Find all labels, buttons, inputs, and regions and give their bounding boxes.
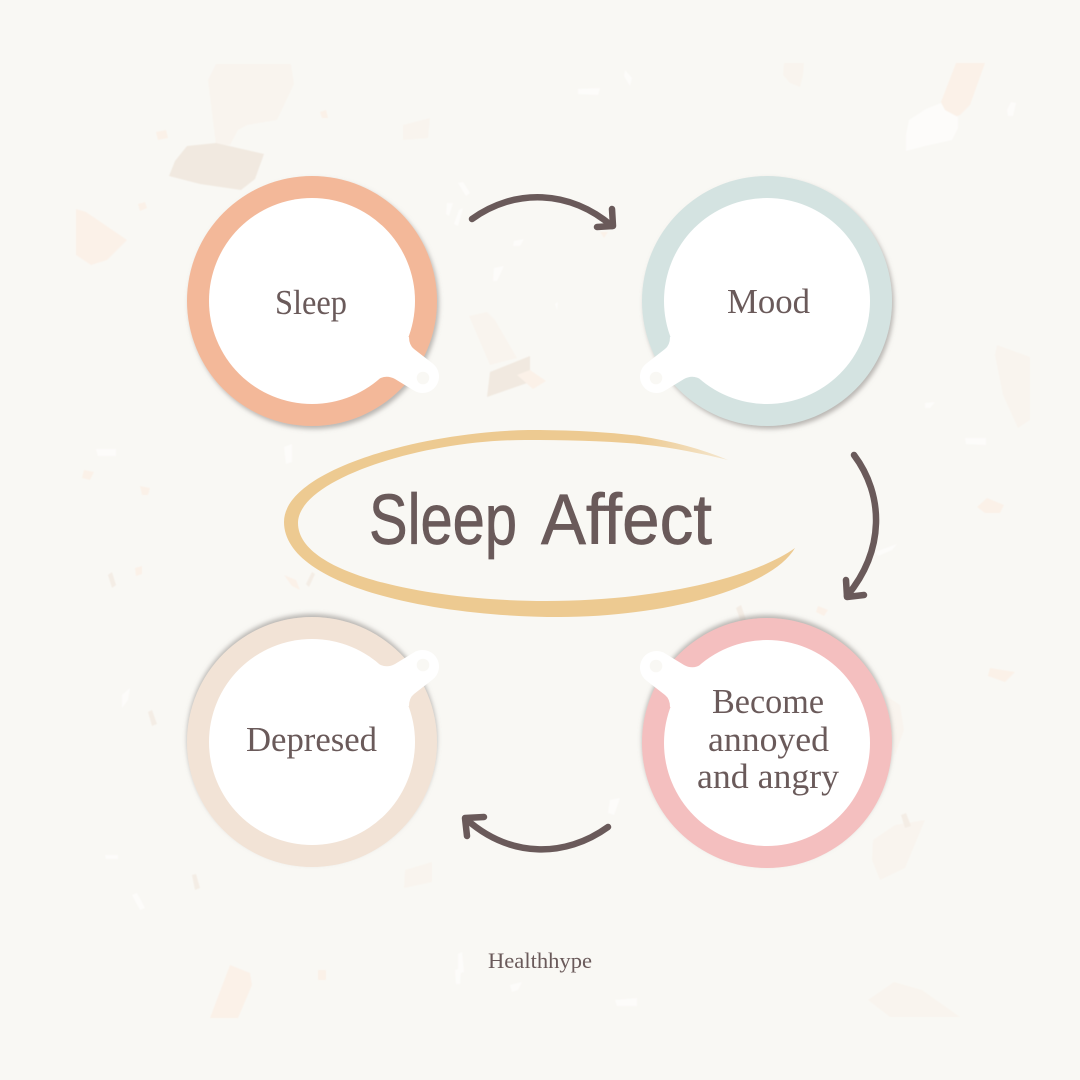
brush ellipse xyxy=(284,430,795,617)
circle: Mood xyxy=(640,176,892,426)
arrow: mood to annoyed xyxy=(846,455,876,597)
label: Become annoyed and angry: annoyed xyxy=(708,720,830,759)
title xyxy=(369,481,712,560)
circle: Depressed xyxy=(187,617,439,867)
title: Sleep xyxy=(369,481,517,560)
ring xyxy=(187,176,437,426)
title: Affect xyxy=(541,481,712,560)
white disc and tab xyxy=(640,640,870,846)
label: Depresed: Depresed xyxy=(246,720,377,759)
circle: Become annoyed and angry xyxy=(640,618,892,868)
ring xyxy=(642,176,892,426)
label: Become annoyed and angry xyxy=(697,682,840,796)
white disc and tab xyxy=(209,639,439,845)
label: Mood: Mood xyxy=(727,282,810,321)
arrow: annoyed to depressed xyxy=(465,817,608,849)
label: Become annoyed and angry: Become xyxy=(712,682,824,721)
ring xyxy=(642,618,892,868)
arrow: sleep to mood xyxy=(472,197,613,227)
white disc and tab xyxy=(640,198,870,404)
label: Become annoyed and angry: and angry xyxy=(697,757,840,796)
circle: Sleep xyxy=(187,176,439,426)
label: Sleep: Sleep xyxy=(275,283,347,322)
ring xyxy=(187,617,437,867)
credit: Healthhype xyxy=(488,948,592,973)
white disc and tab xyxy=(209,198,439,404)
